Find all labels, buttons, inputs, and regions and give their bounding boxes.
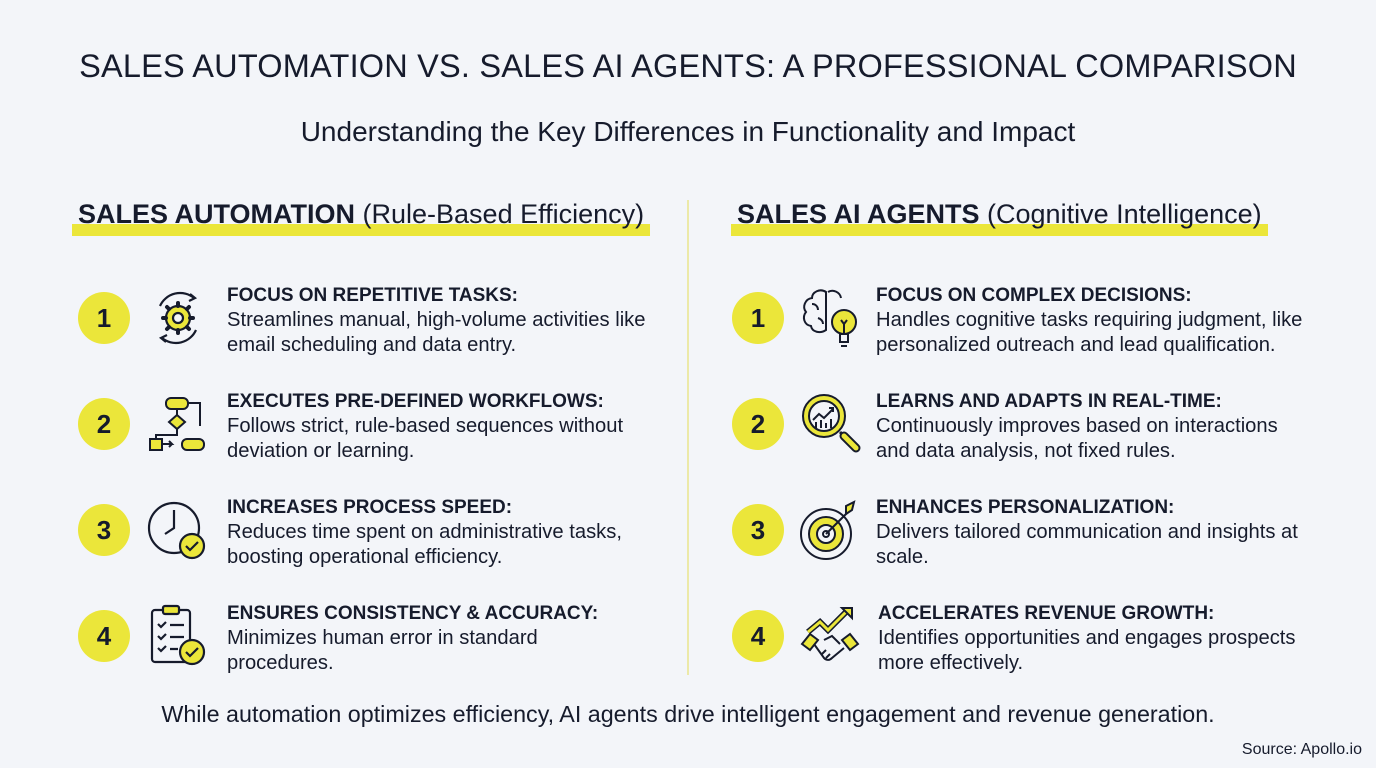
text: Reduces time spent on administrative tasks, boosting operational efficiency. [227, 521, 622, 568]
left item 4 [78, 603, 598, 674]
text [876, 497, 1298, 568]
text [227, 391, 623, 462]
icon: gear cycle [159, 292, 197, 344]
right item 2 [732, 391, 1278, 462]
number 3 [732, 504, 784, 556]
icon: magnifier chart [802, 394, 860, 452]
text: INCREASES PROCESS SPEED: [227, 497, 512, 518]
text [227, 603, 598, 674]
icon: handshake growth [800, 607, 860, 661]
number 2: 2 [97, 409, 111, 439]
number 1 [78, 292, 130, 344]
text: ENSURES CONSISTENCY & ACCURACY: [227, 603, 598, 624]
text: FOCUS ON COMPLEX DECISIONS: [876, 285, 1192, 306]
number 2 [78, 398, 130, 450]
number 1 [732, 292, 784, 344]
subtitle: Understanding the Key Differences in Functionality and Impact [301, 116, 1075, 147]
number 2 [732, 398, 784, 450]
footer statement: While automation optimizes efficiency, AI agents drive intelligent engagement and revenue generation. [161, 701, 1215, 727]
text [876, 391, 1278, 462]
text: Streamlines manual, high-volume activities like email scheduling and data entry. [227, 309, 646, 356]
text: FOCUS ON REPETITIVE TASKS: [227, 285, 518, 306]
number 4 [78, 610, 130, 662]
text [878, 603, 1296, 674]
text: LEARNS AND ADAPTS IN REAL-TIME: [876, 391, 1222, 412]
right item 1 [732, 285, 1302, 356]
title: SALES AUTOMATION VS. SALES AI AGENTS: A PROFESSIONAL COMPARISON [79, 48, 1297, 84]
number 3: 3 [97, 515, 111, 545]
icon: brain bulb [802, 289, 857, 347]
icon: clipboard check [150, 604, 206, 666]
text: Identifies opportunities and engages prospects more effectively. [878, 627, 1296, 674]
number 3: 3 [751, 515, 765, 545]
text: ACCELERATES REVENUE GROWTH: [878, 603, 1214, 624]
right header highlight [731, 224, 1268, 236]
text: Continuously improves based on interactions and data analysis, not fixed rules. [876, 415, 1278, 462]
text: EXECUTES PRE-DEFINED WORKFLOWS: [227, 391, 604, 412]
text: Follows strict, rule-based sequences without deviation or learning. [227, 415, 623, 462]
icon: clock check [148, 502, 206, 560]
right item 4 [732, 603, 1296, 674]
number 4: 4 [97, 621, 111, 651]
text [227, 497, 622, 568]
left header: SALES AUTOMATION (Rule-Based Efficiency) [78, 199, 644, 229]
icon: target [800, 500, 856, 560]
left header highlight [72, 224, 650, 236]
number 4 [732, 610, 784, 662]
number 2: 2 [751, 409, 765, 439]
number 1: 1 [751, 303, 765, 333]
text: ENHANCES PERSONALIZATION: [876, 497, 1174, 518]
text [227, 285, 646, 356]
text: Delivers tailored communication and insights at scale. [876, 521, 1298, 568]
number 4: 4 [751, 621, 765, 651]
right header: SALES AI AGENTS (Cognitive Intelligence) [737, 199, 1262, 229]
icon: workflow [149, 397, 205, 451]
left item 1 [78, 285, 646, 356]
right item 3 [732, 497, 1298, 568]
divider [687, 200, 689, 675]
number 3 [78, 504, 130, 556]
left item 3 [78, 497, 622, 568]
source: Source: Apollo.io [1242, 741, 1362, 758]
number 1: 1 [97, 303, 111, 333]
text: Handles cognitive tasks requiring judgment, like personalized outreach and lead qualification. [876, 309, 1302, 356]
text: Minimizes human error in standard procedures. [227, 627, 538, 674]
left item 2 [78, 391, 623, 462]
text [876, 285, 1302, 356]
